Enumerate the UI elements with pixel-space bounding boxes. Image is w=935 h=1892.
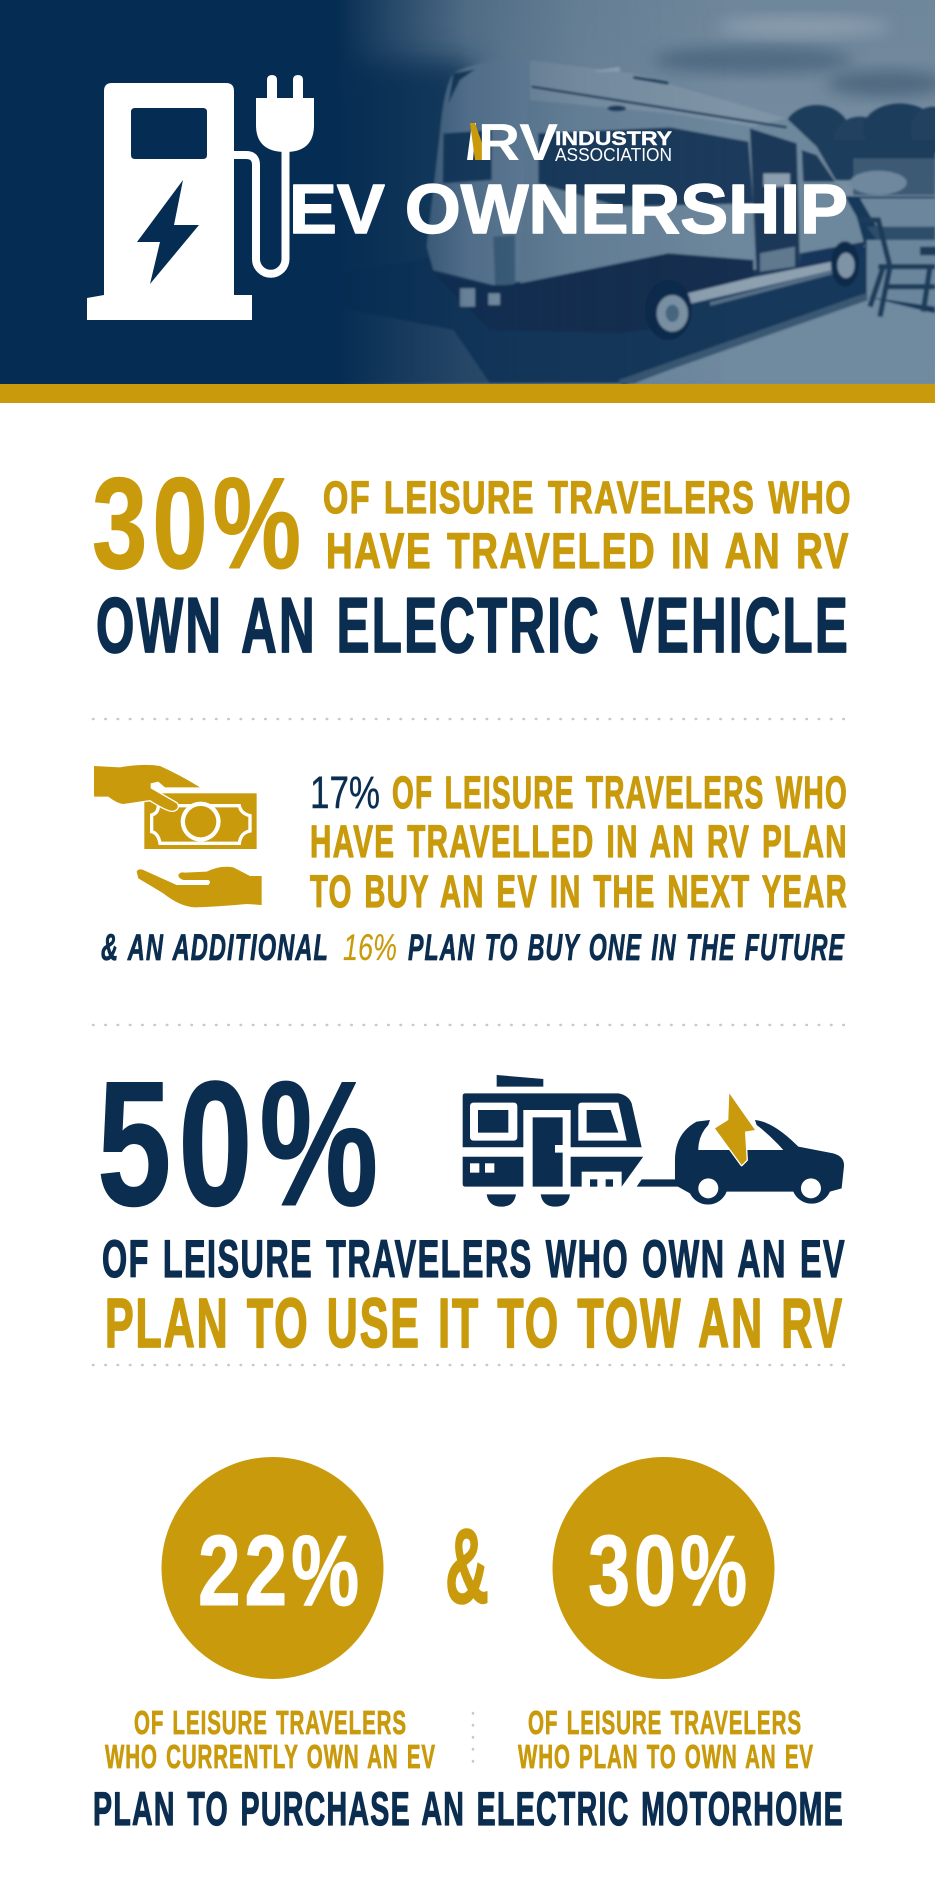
section: electric motorhome <box>93 1457 844 1835</box>
statement with 17% <box>310 767 848 917</box>
icon: charging station <box>87 75 314 320</box>
gold statement <box>323 472 852 579</box>
section: plan to buy an EV <box>94 765 848 968</box>
caption left: WHO CURRENTLY OWN AN EV <box>105 1738 436 1775</box>
logo: RV Industry Association: ASSOCIATION <box>555 145 672 165</box>
ampersand: & <box>445 1506 489 1626</box>
logo: RV Industry Association: INDUSTRY <box>555 128 672 150</box>
stat circle 22% <box>162 1457 384 1679</box>
caption right <box>518 1704 814 1775</box>
statement with 16%: & AN ADDITIONAL <box>101 927 329 968</box>
gold header bar <box>0 384 935 403</box>
stat circle 30% <box>552 1457 774 1679</box>
statement with 16% <box>101 927 845 968</box>
icon: RV towed by electric car <box>460 1075 844 1207</box>
big stat 30%: 30% <box>92 450 306 596</box>
statement with 16%: 16% <box>343 927 397 968</box>
stat circle 22%: 22% <box>198 1515 363 1627</box>
statement with 17%: 17% <box>310 767 380 818</box>
icon: hands exchanging money <box>94 765 262 907</box>
van photo <box>0 0 935 384</box>
logo: RV Industry Association: RV <box>478 114 558 172</box>
title: EV OWNERSHIP <box>289 170 848 248</box>
header banner <box>0 0 935 384</box>
big stat 50%: 50% <box>97 1044 385 1243</box>
logo: RV Industry Association <box>467 114 672 172</box>
caption left: OF LEISURE TRAVELERS <box>134 1704 407 1741</box>
caption left <box>105 1704 436 1775</box>
stat circle 30%: 30% <box>588 1515 751 1627</box>
section: tow an RV <box>97 1044 846 1362</box>
section: 30 percent own an EV <box>92 450 852 669</box>
